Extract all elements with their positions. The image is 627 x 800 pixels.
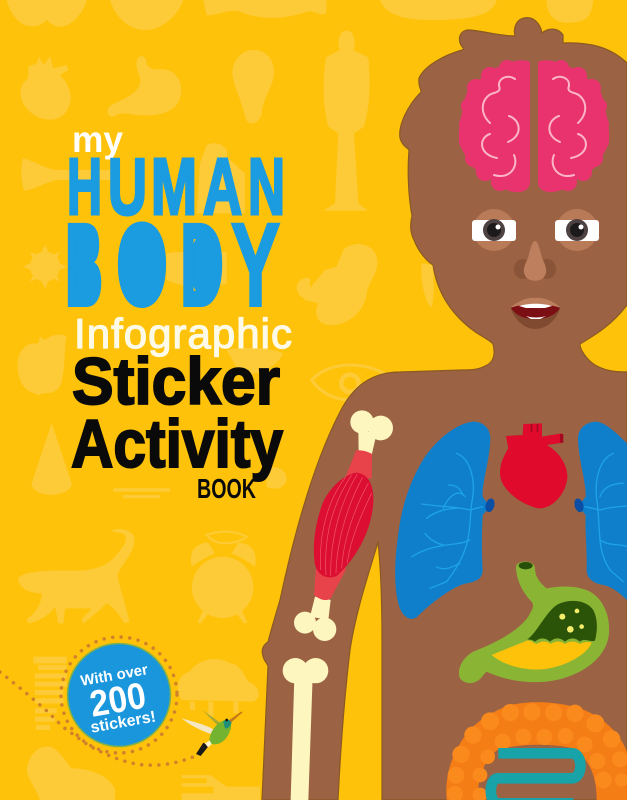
title word: Infographic: Infographic: [74, 310, 292, 357]
badge text: stickers!: [89, 708, 157, 737]
silhouettes: middle left: [18, 143, 310, 498]
icon: left lung: [395, 422, 496, 619]
icon: lower end of upper arm bone: [294, 597, 336, 641]
large intestine: [446, 702, 627, 800]
badge text: [79, 661, 157, 737]
right eye: [555, 209, 599, 251]
nose: [514, 241, 556, 281]
callout: sticker count badge: [68, 644, 170, 746]
icon: upper arm bone top: [350, 410, 393, 455]
dotted flight path: [0, 637, 193, 765]
title word: HUMAN: [67, 142, 285, 231]
icon: brain: [459, 60, 609, 192]
title word: Sticker: Sticker: [72, 344, 280, 418]
badge text: With over: [79, 661, 149, 690]
icon: intestines: [446, 702, 627, 800]
icon: arm muscle: [314, 450, 373, 600]
title word: HUMAN: M: [151, 142, 197, 231]
title word: BODY: [65, 200, 280, 332]
title word: HUMAN: U: [108, 142, 147, 231]
title word: BOOK: BOOK: [197, 473, 256, 504]
title word: Activity: Activity: [71, 406, 283, 482]
icon: right lung: [573, 422, 627, 600]
right hemisphere: [538, 60, 609, 192]
body and head shape: [262, 18, 627, 800]
silhouette: embryo: [297, 244, 434, 400]
badge text: 200: [87, 675, 149, 725]
brain folds: [482, 77, 586, 176]
left hemisphere: [459, 60, 530, 192]
organs drawn in zoom coordinates: [283, 410, 627, 800]
icon: hummingbird: [182, 710, 243, 756]
mouth: [511, 298, 560, 329]
small intestine: [491, 753, 580, 800]
title word: HUMAN: N: [248, 142, 285, 231]
title word: BODY: B: [65, 200, 103, 332]
left eye: [472, 209, 516, 251]
title word: BODY: O: [116, 200, 168, 332]
title word: HUMAN: H: [67, 142, 102, 231]
icon: forearm bone: [283, 658, 328, 800]
body silhouette: [262, 18, 627, 800]
title word: BODY: D: [180, 200, 224, 332]
icon: heart: [500, 423, 567, 508]
title word: HUMAN: A: [203, 142, 242, 231]
silhouettes: top row: [7, 0, 593, 211]
icon: stomach: [459, 562, 609, 683]
silhouettes: lower left: [18, 529, 260, 800]
title word: BODY: Y: [231, 200, 280, 332]
title word: my: my: [72, 119, 123, 160]
title: book title text block: [65, 119, 292, 504]
